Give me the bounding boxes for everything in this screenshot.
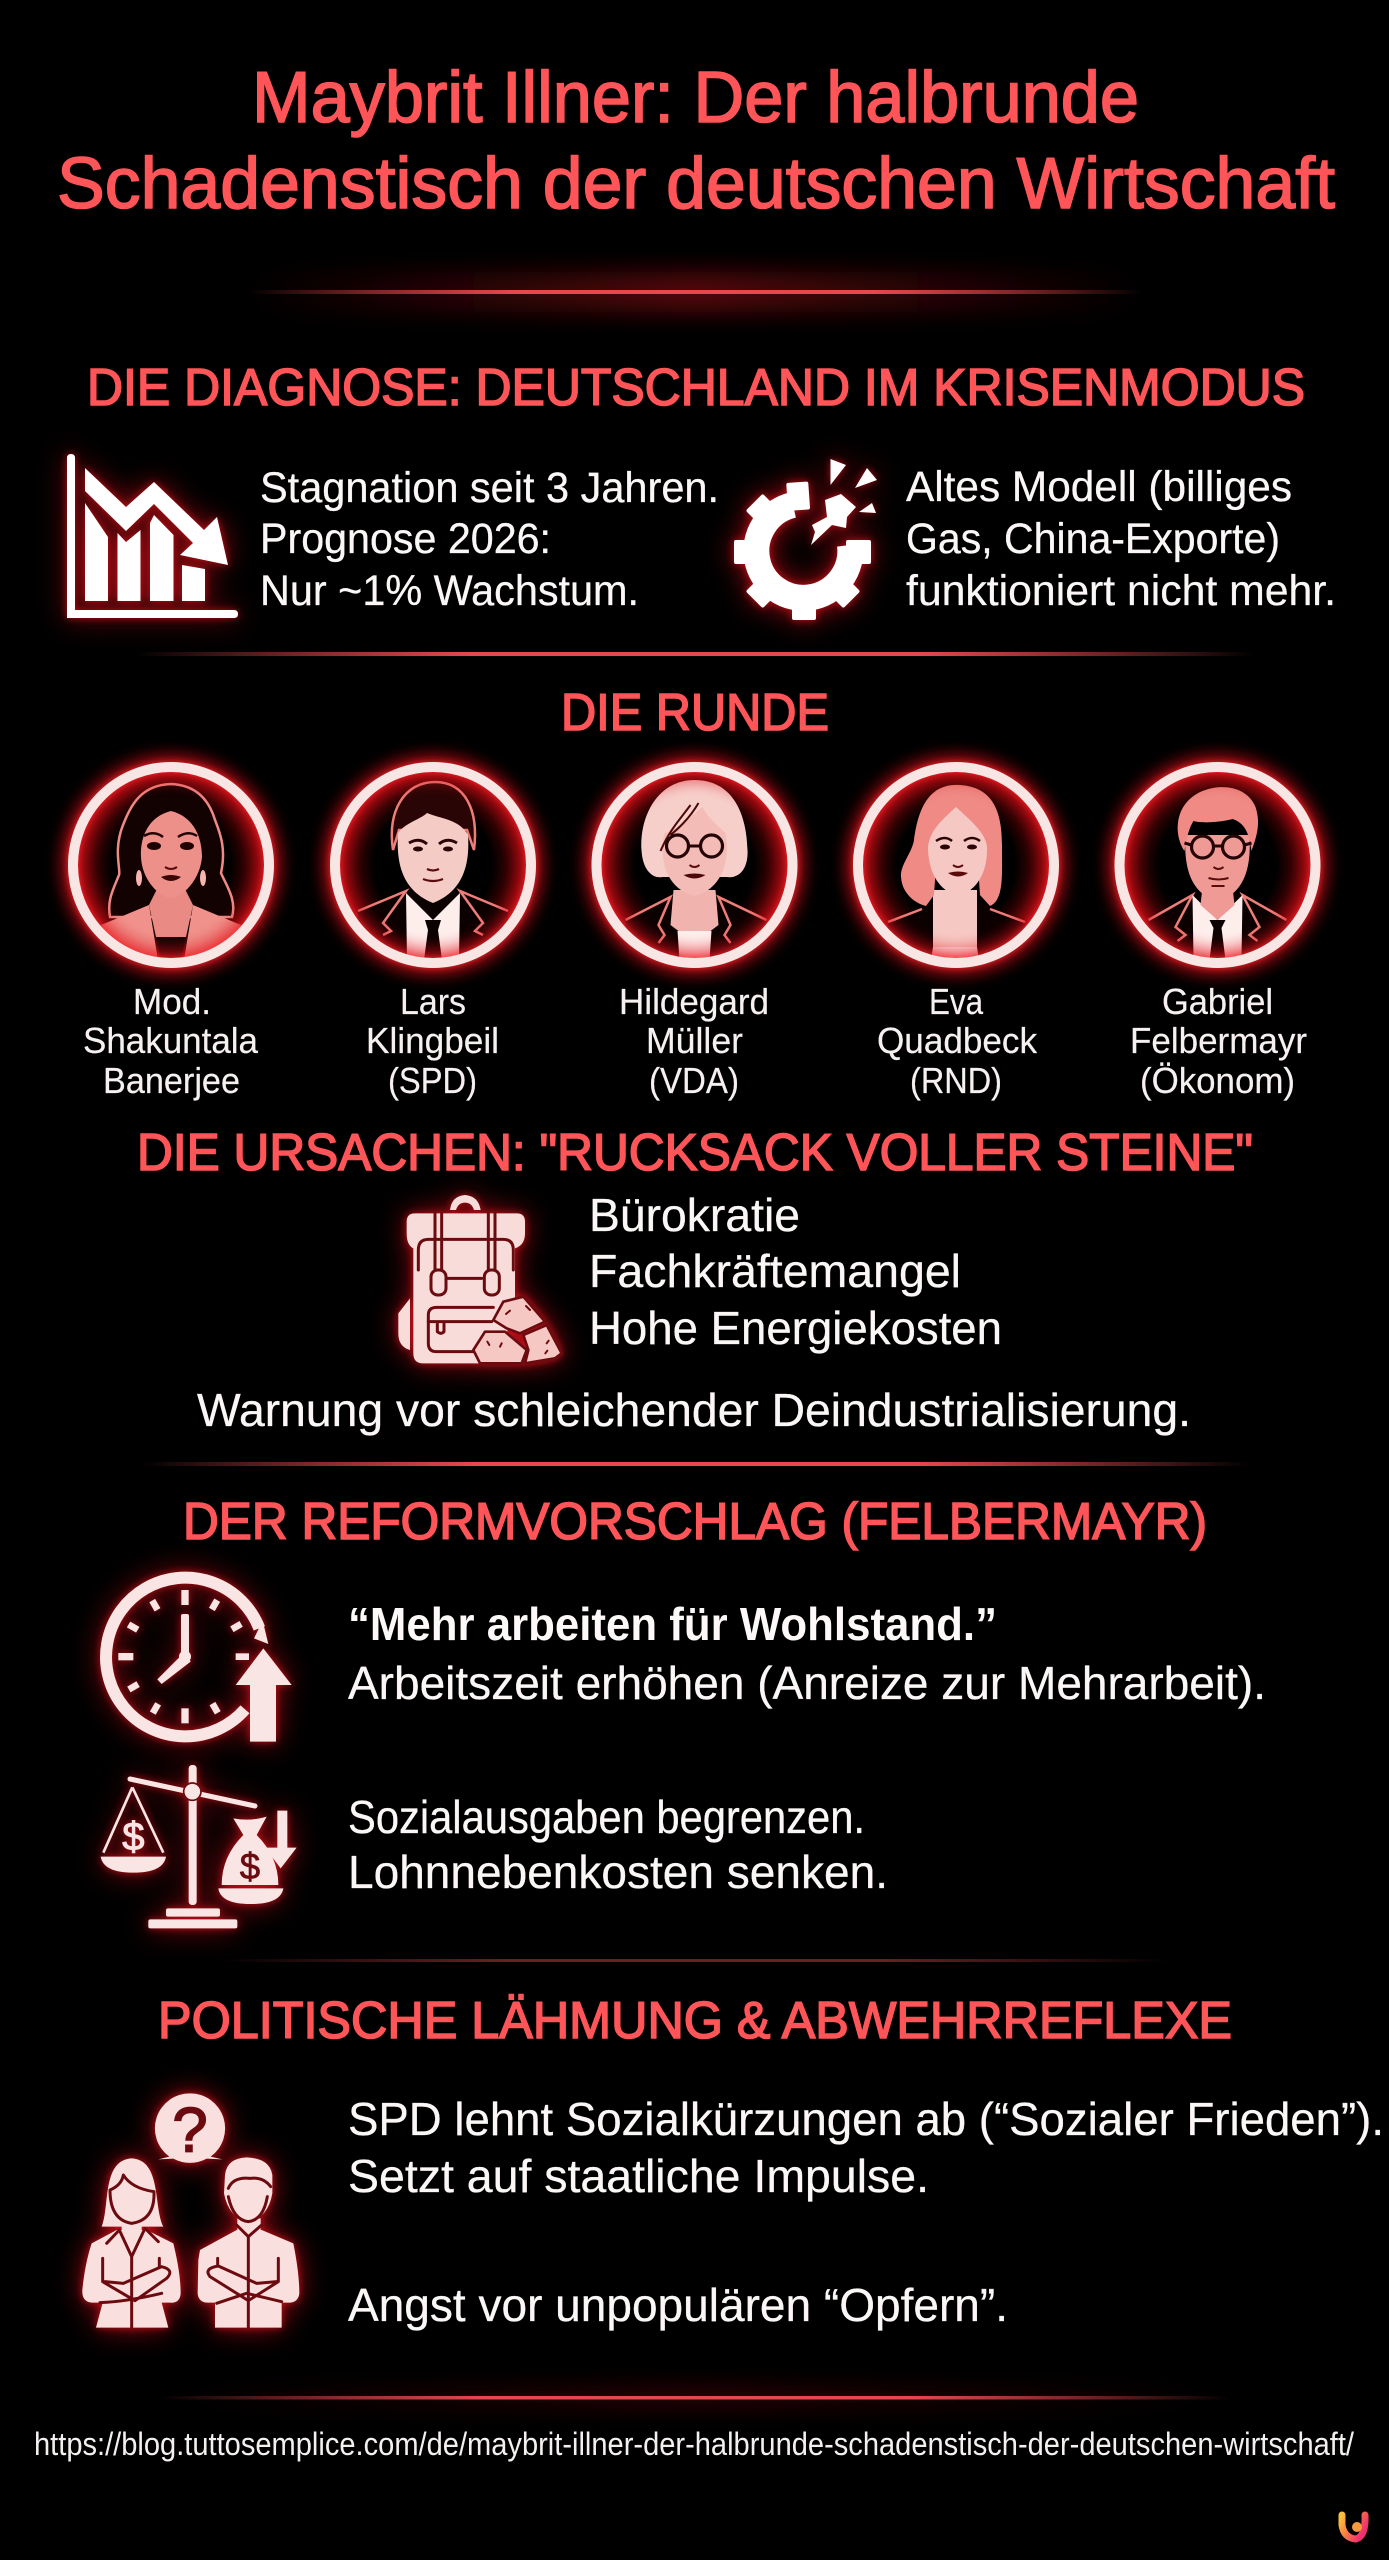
icon: two people with question mark	[82, 2093, 299, 2328]
title: Schadenstisch der deutschen Wirtschaft	[57, 144, 1335, 224]
text: fear of sacrifices: Angst vor unpopulären “Opfern”.	[348, 2279, 1008, 2331]
title	[57, 58, 1335, 224]
list: causes: Hohe Energiekosten	[589, 1302, 1002, 1354]
icon: broken gear	[734, 459, 877, 620]
text: social spending	[348, 1791, 888, 1898]
text: old model	[906, 463, 1336, 615]
portrait: Gabriel Felbermayr	[1120, 767, 1316, 963]
list: causes: Fachkräftemangel	[589, 1245, 961, 1297]
icon: logo	[1342, 2515, 1365, 2539]
portrait: Eva Quadbeck	[858, 767, 1054, 963]
text: work more	[348, 1598, 1266, 1709]
icon: two people with question mark: ?	[172, 2096, 208, 2166]
text: old model: Gas, China-Exporte)	[906, 515, 1280, 563]
heading: political paralysis: POLITISCHE LÄHMUNG & ABWEHRREFLEXE	[158, 1992, 1232, 2050]
names of the guests: (RND)	[910, 1060, 1002, 1101]
list: causes: Bürokratie	[589, 1189, 800, 1241]
names of the guests: Banerjee	[103, 1060, 240, 1101]
heading: reform proposal: DER REFORMVORSCHLAG (FELBERMAYR)	[183, 1493, 1207, 1551]
names of the guests: Felbermayr	[1130, 1020, 1307, 1061]
text: stagnation: Nur ~1% Wachstum.	[260, 567, 639, 615]
icon: scale with money bag: $	[240, 1846, 260, 1887]
names of the guests: Eva	[929, 981, 984, 1022]
panel: causes	[137, 1124, 1253, 1436]
names of the guests: Mod.	[133, 981, 211, 1022]
names of the guests: (SPD)	[388, 1060, 477, 1101]
portrait: Shakuntala Banerjee	[73, 767, 269, 963]
text: stagnation: Prognose 2026:	[260, 515, 551, 563]
names of the guests: Hildegard	[619, 981, 769, 1022]
names of the guests	[83, 981, 1307, 1101]
text: stagnation	[260, 464, 719, 615]
text: SPD position	[348, 2093, 1384, 2202]
panel: political paralysis	[82, 1992, 1384, 2331]
panel: diagnosis	[67, 359, 1336, 620]
names of the guests: Klingbeil	[366, 1020, 499, 1061]
list: causes	[589, 1189, 1002, 1354]
names of the guests: Quadbeck	[877, 1020, 1038, 1061]
text: warning: Warnung vor schleichender Deindustrialisierung.	[197, 1384, 1191, 1436]
names of the guests: Lars	[400, 981, 466, 1022]
text: SPD position: SPD lehnt Sozialkürzungen ab (“Sozialer Frieden”).	[348, 2093, 1384, 2145]
text: social spending: Sozialausgaben begrenzen.	[348, 1791, 865, 1843]
text: work more: Arbeitszeit erhöhen (Anreize zur Mehrarbeit).	[348, 1657, 1266, 1709]
portrait: Hildegard Müller	[596, 767, 792, 963]
icon: falling bar chart	[67, 454, 238, 618]
text: old model: funktioniert nicht mehr.	[906, 567, 1336, 615]
heading: diagnosis: DIE DIAGNOSE: DEUTSCHLAND IM KRISENMODUS	[87, 359, 1305, 417]
text: SPD position: Setzt auf staatliche Impulse.	[348, 2150, 929, 2202]
panel: the panel guests	[73, 684, 1316, 1101]
heading: die runde: DIE RUNDE	[561, 684, 829, 742]
panel: reform proposal	[101, 1493, 1266, 1928]
text: stagnation: Stagnation seit 3 Jahren.	[260, 464, 719, 512]
icon: scale with money bag: $	[122, 1815, 144, 1859]
heading: causes: DIE URSACHEN: "RUCKSACK VOLLER STEINE"	[137, 1124, 1253, 1182]
names of the guests: (Ökonom)	[1140, 1060, 1295, 1101]
names of the guests: Shakuntala	[83, 1020, 259, 1061]
icon: backpack with stones	[398, 1195, 562, 1363]
names of the guests: Müller	[646, 1020, 743, 1061]
text: old model: Altes Modell (billiges	[906, 463, 1292, 511]
icon: clock with up arrow	[106, 1578, 292, 1742]
names of the guests: (VDA)	[649, 1060, 739, 1101]
portrait: Lars Klingbeil	[335, 767, 531, 963]
title: Maybrit Illner: Der halbrunde	[252, 58, 1139, 138]
text: social spending: Lohnnebenkosten senken.	[348, 1846, 888, 1898]
text: work more: “Mehr arbeiten für Wohlstand.”	[348, 1598, 997, 1650]
names of the guests: Gabriel	[1162, 981, 1273, 1022]
icon: scale with money bag	[101, 1765, 297, 1928]
